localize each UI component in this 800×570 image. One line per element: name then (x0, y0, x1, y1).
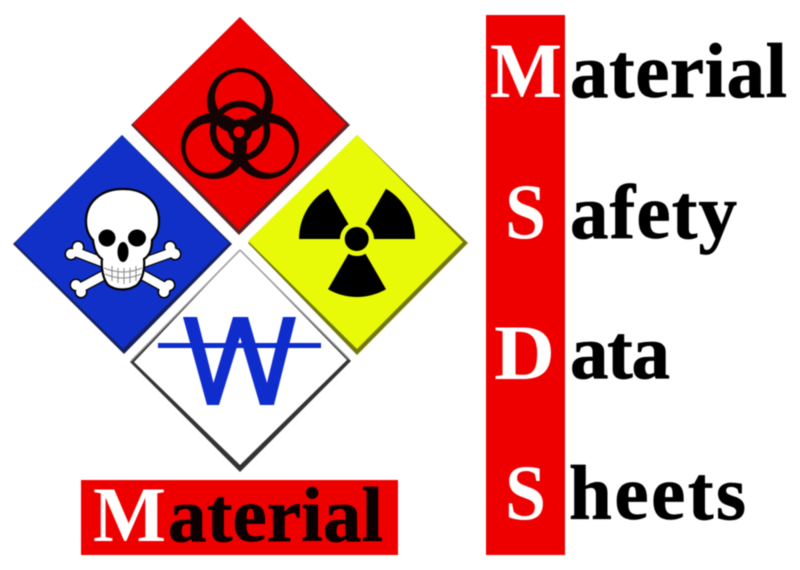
bottom label: Material: M (93, 471, 166, 558)
white diamond: water reactive (130, 250, 351, 472)
red vertical bar with initials: S (505, 168, 546, 255)
yellow diamond: radiation (248, 135, 468, 355)
word: Sheets: heets (569, 450, 746, 536)
icon: biohazard symbol (181, 68, 299, 179)
bottom label: Material (81, 471, 398, 558)
red vertical bar with initials: M (490, 27, 562, 114)
red vertical bar with initials (486, 15, 565, 555)
word: Safety: afety (570, 169, 737, 255)
blue diamond: toxic (13, 135, 232, 354)
word: Material: aterial (570, 28, 787, 114)
icon: skull and crossbones (64, 189, 182, 298)
word: Data: ata (570, 309, 670, 395)
icon: radiation trefoil (299, 189, 415, 297)
bottom label: Material: aterial (168, 472, 383, 558)
red vertical bar with initials: D (494, 309, 555, 396)
red vertical bar with initials: S (505, 449, 546, 536)
icon: crossed W (158, 317, 321, 405)
red diamond: biohazard (131, 17, 350, 235)
